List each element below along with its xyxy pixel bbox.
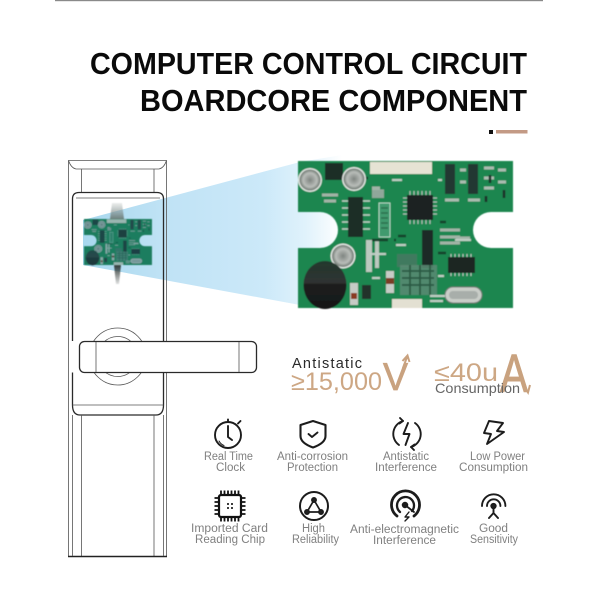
feature: low power consumption: Low Power: [470, 451, 525, 463]
spec: antistatic: ≥15,000: [291, 368, 382, 396]
feature: antistatic interference: Interference: [375, 462, 437, 474]
lock rosette: [89, 328, 146, 385]
feature: real time clock: Real Time: [204, 451, 253, 463]
feature: anti-corrosion protection: [277, 421, 348, 474]
feature: high reliability: High: [302, 523, 325, 535]
spec: antistatic: V: [383, 356, 408, 399]
feature: antistatic interference: [375, 418, 437, 474]
feature: high reliability: [292, 492, 339, 546]
title: BOARDCORE COMPONENT: [140, 84, 527, 118]
feature: antistatic interference: Antistatic: [383, 451, 429, 463]
icon: lightning bolt: [484, 421, 504, 444]
feature: anti-electromagnetic interference: Anti-electromagnetic: [350, 524, 459, 536]
icon: chip: [214, 490, 246, 522]
spec: consumption: A: [500, 344, 528, 404]
feature: good sensitivity: Sensitivity: [470, 534, 518, 546]
feature: anti-corrosion protection: Anti-corrosion: [277, 451, 348, 463]
spec: consumption: ≤40u: [434, 359, 498, 387]
feature: low power consumption: [459, 421, 528, 474]
lever handle: [80, 342, 256, 372]
title: [90, 47, 527, 118]
icon: static circle: [393, 418, 421, 450]
feature: anti-electromagnetic interference: [350, 491, 459, 547]
feature: anti-electromagnetic interference: Interference: [373, 535, 436, 547]
feature: real time clock: [204, 420, 253, 474]
icon: shield: [300, 421, 326, 448]
feature: low power consumption: Consumption: [459, 462, 528, 474]
icon: electromagnetic target: [392, 491, 420, 521]
door lock line drawing: [68, 160, 256, 556]
feature: anti-corrosion protection: Protection: [287, 462, 338, 474]
feature: good sensitivity: Good: [479, 523, 508, 535]
icon: triangle network: [300, 492, 328, 520]
feature: high reliability: Reliability: [292, 534, 339, 546]
top border line: [55, 0, 543, 1]
large circuit board photo: [298, 161, 513, 309]
projection beam: [83, 155, 342, 310]
spec: antistatic: [291, 356, 410, 399]
feature: imported card reading chip: Reading Chip: [195, 534, 265, 546]
title: COMPUTER CONTROL CIRCUIT: [90, 47, 527, 81]
icon: antenna signal: [482, 494, 505, 518]
spec: antistatic: Antistatic: [292, 356, 362, 372]
feature: real time clock: Clock: [216, 462, 245, 474]
accent marker: [489, 130, 528, 134]
spec: consumption: Consumption: [435, 380, 520, 396]
small circuit board inside lock: [84, 203, 152, 284]
icon: clock: [215, 420, 241, 448]
spec: consumption: [434, 344, 530, 404]
feature: imported card reading chip: Imported Card: [191, 523, 268, 535]
feature: good sensitivity: [470, 494, 518, 546]
feature: imported card reading chip: [191, 490, 268, 546]
